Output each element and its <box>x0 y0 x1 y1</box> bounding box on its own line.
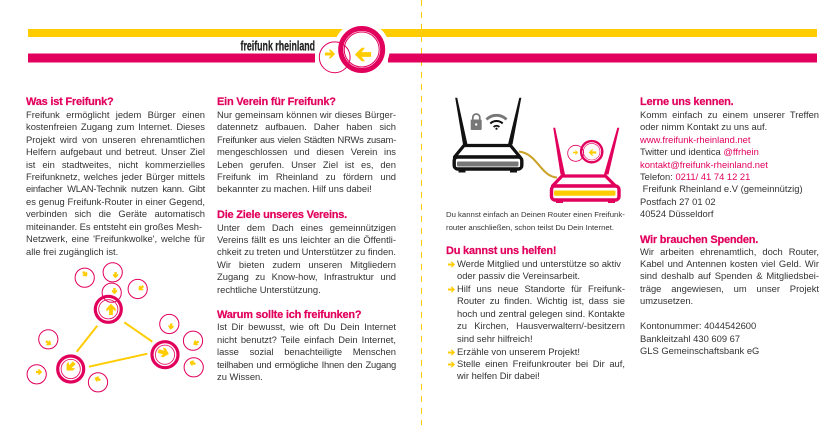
text: Was ist Freifunk: ist ein stadtweites, nicht kommerzielles <box>26 159 205 170</box>
text: contact details: Twitter und identica @ffrhein <box>640 146 759 157</box>
heading: Lerne uns kennen.: Lerne uns kennen. <box>640 96 733 108</box>
text: Wir brauchen Spenden: sind deshalb auf Spenden & Mitgliedsbei- <box>640 270 819 281</box>
text: Wir brauchen Spenden: träge angewiesen, um unser Projekt <box>640 283 819 294</box>
list item 2 <box>448 283 625 344</box>
caption: router: Du kannst einfach an Deinen Router einen Freifunk- <box>446 210 625 219</box>
text: Was ist Freifunk: Netzwerk, eine 'Freifunkwolke', welche für <box>26 233 205 244</box>
text: Was ist Freifunk: Helfern aufgebaut und betreut. Unser Ziel <box>26 146 205 157</box>
text: Ein Verein: mengeschlossen und diesen Verein ins <box>217 146 396 157</box>
text: Wir brauchen Spenden: GLS Gemeinschaftsbank eG <box>640 345 759 356</box>
text: Wir brauchen Spenden: Bankleitzahl 430 609 67 <box>640 333 740 344</box>
text: Ein Verein: bekannter zu machen. Hilf uns dabei! <box>217 183 372 194</box>
text: Ein Verein: Freifunk im Rheinland zu fördern und <box>217 171 396 182</box>
logo: freifunk rheinland: freifunk rheinland <box>240 38 315 54</box>
cable between routers <box>519 152 557 178</box>
text: contact details: Komm einfach zu einem unserer Treffen <box>640 109 819 120</box>
icon: padlock <box>471 114 482 130</box>
text: Wir brauchen Spenden <box>640 246 819 356</box>
text: Wir brauchen Spenden: Kontonummer: 4044542600 <box>640 320 756 331</box>
text: contact details: Freifunk Rheinland e.V (gemeinnützig) <box>643 183 803 194</box>
text: contact details: oder nimm Kontakt zu uns auf. <box>640 121 767 132</box>
list item 2: Hilf uns neue Standorte für Freifunk- <box>457 283 625 294</box>
text: Was ist Freifunk: es genug Freifunk-Router in einer Gegend, <box>26 196 205 207</box>
text: Die Ziele: Vereins fällt es uns leichter an die Öffentli- <box>217 234 396 245</box>
text: Die Ziele <box>217 222 396 295</box>
icon: wifi signal <box>486 115 506 130</box>
text: Warum sollte ich freifunken: Ist Dir bewusst, wie oft Du Dein Internet <box>217 321 396 332</box>
list item 2: Router zu finden. Wichtig ist, dass sie <box>457 295 625 306</box>
text: Die Ziele: Wir bieten zudem unseren Mitgliedern <box>217 259 396 270</box>
text: Ein Verein <box>217 109 396 194</box>
text: Wir brauchen Spenden: Wir arbeiten ehrenamtlich, doch Router, <box>640 246 819 256</box>
caption: router <box>446 210 625 232</box>
text: contact details: Telefon: 0211/ 41 74 12 21 <box>640 171 750 182</box>
text: Was ist Freifunk: miteinander. Es entsteht ein großes Mesh- <box>26 221 202 232</box>
header bar: yellow <box>28 29 817 37</box>
list item 1: oder passiv die Vereinsarbeit. <box>457 270 580 281</box>
text: Ein Verein: Nur gemeinsam können wir dieses Bürger- <box>217 109 396 120</box>
caption: router: router anschließen, schon teilst Du Dein Internet. <box>446 223 614 232</box>
text: Warum sollte ich freifunken: lasse sozial benachteiligte Menschen <box>217 346 396 357</box>
text: Warum sollte ich freifunken: nicht benutzt? Teile einfach Dein Internet, <box>217 334 396 345</box>
list item 3: Erzähle von unserem Projekt! <box>457 346 580 356</box>
text: Die Ziele: Unter dem Dach eines gemeinnützigen <box>217 222 396 232</box>
list item 4: Stelle einen Freifunkrouter bei Dir auf, <box>457 358 625 369</box>
heading: Ein Verein für Freifunk?: Ein Verein für Freifunk? <box>217 96 336 108</box>
heading: Warum sollte ich freifunken?: Warum sollte ich freifunken? <box>217 309 361 321</box>
list item 4 <box>448 358 625 381</box>
list item 1 <box>448 258 621 281</box>
text: Ein Verein: Leben gerufen. Unser Ziel ist es, den <box>217 159 396 170</box>
text: Wir brauchen Spenden: umzusetzen. <box>640 295 693 306</box>
fold line <box>420 0 422 425</box>
text: Was ist Freifunk: alle frei zugänglich ist. <box>26 246 118 257</box>
text: Die Ziele: chkeit zu treten und Unterstützer zu finden. <box>217 246 396 257</box>
text: contact details: www.freifunk-rheinland.net <box>640 134 750 145</box>
heading: Du kannst uns helfen!: Du kannst uns helfen! <box>446 245 556 257</box>
text: Was ist Freifunk <box>26 109 206 257</box>
heading: Wir brauchen Spenden.: Wir brauchen Spenden. <box>640 234 758 246</box>
text: Was ist Freifunk: Projekt wird von unseren ehrenamtlichen <box>26 134 205 145</box>
list item 4: wir helfen Dir dabei! <box>457 370 540 381</box>
text: Was ist Freifunk: kostenfreien Zugang zum Internet. Dieses <box>26 121 205 132</box>
icon: freifunk router <box>552 128 619 203</box>
list item 1: Werde Mitglied und unterstütze so aktiv <box>457 258 621 269</box>
text: contact details: 40524 Düsseldorf <box>640 208 714 219</box>
text: Die Ziele: Zugang zu Know-how, Infrastruktur und <box>217 271 396 282</box>
list item 2: zu Kirchen, Hausverwaltern/-besitzern <box>457 320 625 331</box>
heading: Die Ziele unseres Vereins.: Die Ziele unseres Vereins. <box>217 209 347 221</box>
text: Warum sollte ich freifunken: zu Wissen. <box>217 371 263 382</box>
mesh network diagram <box>27 263 203 392</box>
text: Warum sollte ich freifunken: teilhaben und ermögliche Ihnen den Zugang <box>217 358 396 370</box>
list item 2: sind sehr hilfreich! <box>457 333 533 344</box>
list item 2: hoch und zentral gelegen sind. Kontakte <box>457 308 625 319</box>
text: Wir brauchen Spenden: Kabel und Antennen kosten viel Geld. Wir <box>640 258 819 269</box>
text: Die Ziele: rechtliche Unterstützung. <box>217 284 321 295</box>
text: Ein Verein: Freifunker aus vielen Städten NRWs zusam- <box>217 134 396 145</box>
text: Ein Verein: datennetz aufbauen. Daher haben sich <box>217 121 396 132</box>
header bar: magenta <box>28 54 817 62</box>
text: contact details <box>640 109 819 219</box>
icon: private black router <box>454 98 522 172</box>
text: Was ist Freifunk: Freifunknetz, welches jeder Bürger mittels <box>26 171 205 182</box>
text: Was ist Freifunk: einfacher WLAN-Technik nutzen kann. Gibt <box>26 183 205 194</box>
text: contact details: kontakt@freifunk-rheinland.net <box>640 159 768 170</box>
heading: Was ist Freifunk?: Was ist Freifunk? <box>26 96 114 108</box>
logo: freifunk rheinland <box>240 22 390 78</box>
text: contact details: Postfach 27 01 02 <box>640 196 716 207</box>
text: Was ist Freifunk: verbinden sich die Geräte automatisch <box>26 208 205 219</box>
text: Warum sollte ich freifunken <box>217 321 396 382</box>
text: Was ist Freifunk: Freifunk ermöglicht jedem Bürger einen <box>26 109 205 120</box>
